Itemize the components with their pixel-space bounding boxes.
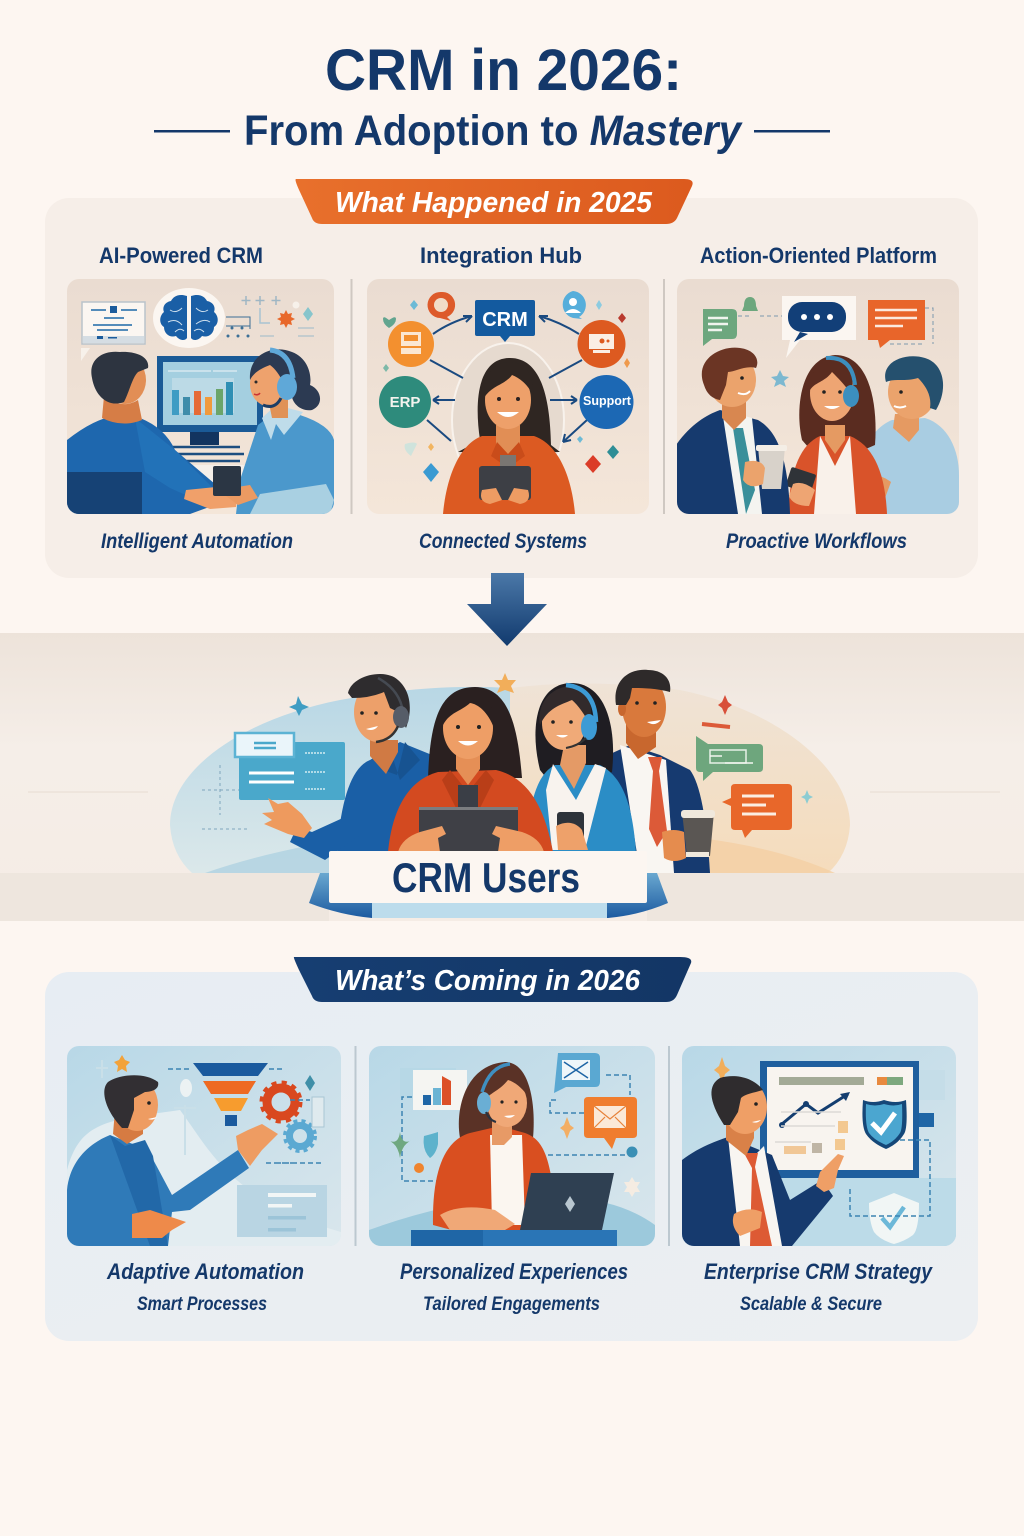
panel: what happened in 2025	[45, 179, 978, 578]
person: man right	[867, 356, 959, 514]
desk	[411, 1230, 617, 1246]
panel: what's coming in 2026	[45, 957, 978, 1341]
icon: user bubble	[563, 291, 586, 319]
icon: orange chat	[868, 300, 925, 348]
person: presenter	[67, 1075, 278, 1246]
node: ERP	[379, 376, 431, 428]
hub ring	[451, 342, 565, 458]
person: man in suit with coffee	[608, 670, 715, 873]
heading: Integration Hub: Integration Hub	[420, 243, 582, 268]
keyboard	[168, 447, 244, 461]
chat green right	[696, 736, 763, 781]
red dash	[702, 724, 730, 727]
board with chart and shield	[760, 1061, 945, 1178]
icon: blue sparkle	[289, 696, 309, 716]
caption: Adaptive Automation	[106, 1259, 304, 1315]
node: Support: Support	[583, 394, 632, 408]
icon: green chat	[703, 309, 737, 346]
doc lines	[237, 1185, 327, 1237]
icon: red gear	[262, 1083, 300, 1121]
icon: computer monitor with bar chart	[157, 356, 263, 445]
illustration: personalized experiences	[369, 1046, 655, 1246]
caption: Enterprise CRM Strategy: Enterprise CRM Strategy	[704, 1259, 933, 1284]
illustration: integration hub	[367, 279, 649, 514]
caption: Proactive Workflows: Proactive Workflows	[726, 530, 907, 553]
icon: document card	[81, 302, 145, 361]
person: woman in blue with phone and headset	[526, 683, 637, 873]
caption: Enterprise CRM Strategy	[704, 1259, 933, 1315]
person: woman center	[785, 355, 887, 514]
band: CRM users	[0, 633, 1024, 921]
icon: funnel	[193, 1063, 268, 1126]
sub-caption: Tailored Engagements: Tailored Engagements	[423, 1294, 600, 1315]
person: central woman with tablet	[388, 687, 553, 852]
dashed connectors	[850, 1140, 930, 1216]
icon: red sparkle	[718, 695, 732, 715]
icon: blue shield with check	[862, 1100, 907, 1149]
decorative icons	[96, 1055, 324, 1163]
icon: blue mail bubble	[554, 1053, 600, 1093]
person: woman with tablet	[443, 358, 575, 514]
small decorative diamonds	[383, 300, 630, 482]
laptop	[520, 1173, 614, 1230]
icon: pale shield with check	[869, 1193, 919, 1244]
subtitle: From Adoption to Mastery	[244, 107, 743, 155]
icon: brain	[153, 288, 225, 348]
caption: Intelligent Automation: Intelligent Automation	[101, 530, 293, 553]
node: CRM	[475, 300, 535, 342]
chat boxes left	[235, 733, 345, 800]
ribbon heading: What Happened in 2025	[296, 179, 693, 224]
illustration: adaptive automation	[67, 1046, 341, 1246]
banner: CRM Users	[309, 851, 668, 918]
icon: location pin	[428, 292, 455, 321]
ribbon heading: What Happened in 2025: What Happened in 2025	[335, 187, 653, 219]
chat orange right	[722, 784, 792, 838]
banner: CRM Users: CRM Users	[392, 854, 580, 901]
icon: report with chart	[400, 1068, 467, 1110]
illustration: background blobs	[170, 683, 850, 873]
title: CRM in 2026:	[325, 38, 682, 103]
node: ERP: ERP	[390, 394, 420, 411]
person: woman with headset	[213, 349, 334, 514]
person: man left in suit	[676, 348, 790, 514]
caption: Adaptive Automation: Adaptive Automation	[106, 1259, 304, 1284]
caption: Personalized Experiences	[400, 1259, 628, 1315]
node: orange document	[388, 321, 434, 367]
sub-caption: Smart Processes: Smart Processes	[137, 1294, 267, 1315]
icon: blue gear	[285, 1121, 315, 1151]
heading: Action-Oriented Platform: Action-Oriented Platform	[700, 243, 937, 268]
person: man from behind	[67, 352, 238, 514]
icon: orange mail bubble	[584, 1097, 637, 1149]
person: woman with laptop	[411, 1062, 617, 1246]
ribbon heading: What's Coming in 2026	[294, 957, 691, 1002]
decorative sparkle	[714, 1057, 730, 1084]
illustration: action-oriented platform	[676, 279, 959, 514]
node: Support	[580, 375, 634, 429]
icon: decorative tech marks	[226, 296, 314, 338]
person: man in blue shirt with headset	[262, 674, 460, 873]
icon: teal sparkle	[801, 790, 813, 804]
lower floor strip	[0, 873, 329, 921]
arrow: down	[467, 573, 547, 646]
connector arrows	[427, 316, 587, 442]
icon: orange star	[494, 673, 516, 693]
title	[154, 38, 830, 155]
caption: Connected Systems: Connected Systems	[419, 530, 587, 553]
caption: Personalized Experiences: Personalized Experiences	[400, 1259, 628, 1284]
node: monitor	[578, 320, 626, 368]
sub-caption: Scalable & Secure: Scalable & Secure	[740, 1294, 882, 1315]
illustration: AI-powered CRM	[67, 279, 334, 514]
illustration: enterprise CRM strategy	[682, 1046, 956, 1246]
dashed connectors and shapes	[388, 1075, 640, 1197]
icon: navy chat in white bubble	[782, 296, 856, 358]
person: presenter in suit	[682, 1076, 844, 1246]
heading: AI-Powered CRM: AI-Powered CRM	[99, 243, 263, 268]
icon: bell and sparkles	[738, 297, 933, 387]
node: CRM: CRM	[482, 309, 528, 331]
ribbon heading: What's Coming in 2026: What’s Coming in 2026	[335, 965, 641, 997]
